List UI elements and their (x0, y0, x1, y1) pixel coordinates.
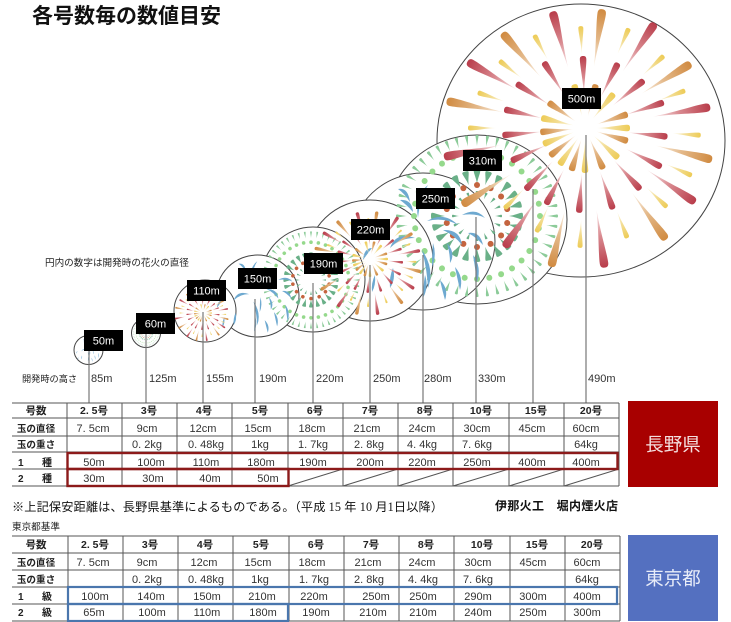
badge: Tokyo (628, 535, 718, 621)
row: weight (17, 574, 599, 586)
row: diameter (17, 557, 600, 569)
firework: 110m red burst (175, 289, 229, 341)
header row: 3号 (142, 539, 158, 551)
fireworks size chart (74, 4, 725, 403)
height lines (89, 135, 586, 403)
firework: 250m willow burst (363, 185, 485, 300)
header row: 15号 (526, 539, 548, 551)
badge: Nagano (628, 401, 718, 487)
header row: 号数 (26, 538, 47, 551)
header row: 15号 (525, 405, 547, 417)
row: class 1: 400m (572, 457, 600, 469)
header row: 3号 (141, 405, 157, 417)
row: diameter: 9cm (137, 557, 157, 569)
diameter labels (84, 88, 601, 351)
header row: 5号 (252, 405, 268, 417)
row: weight: 0. 48kg (188, 439, 224, 451)
row: weight: 7. 6kg (462, 439, 492, 451)
firework: 500m red and gold burst (443, 9, 713, 268)
header row: 20号 (581, 539, 603, 551)
row: class 1: 290m (464, 591, 492, 603)
row: diameter: 30cm (464, 423, 490, 435)
row: diameter: 24cm (409, 557, 435, 569)
row: class 2 (18, 472, 279, 485)
row: class 1: 100m (81, 591, 109, 603)
row: class 1: 250m (409, 591, 437, 603)
height labels: 220m (316, 373, 344, 385)
diameter labels: 220m (357, 224, 384, 236)
firework: 150m willow burst (217, 261, 293, 333)
height labels (22, 373, 616, 385)
row: diameter: 30cm (465, 557, 491, 569)
row: weight: 0. 2kg (132, 439, 162, 451)
row: weight: 2. 8kg (354, 439, 384, 451)
row: class 2: 250m (519, 607, 547, 619)
row: weight: 0. 2kg (132, 574, 162, 586)
row: class 1 (18, 456, 600, 469)
header row: 4号 (197, 539, 213, 551)
row: class 2: 2 (18, 474, 24, 485)
row: diameter: 7. 5cm (76, 557, 110, 569)
header row: 4号 (196, 405, 212, 417)
firework: 50m willow burst (76, 339, 100, 362)
row: class 1: 400m (573, 591, 601, 603)
blue highlight boxes (68, 587, 617, 621)
row: class 2: 180m (249, 607, 277, 619)
row: class 1: 110m (193, 457, 219, 469)
row: diameter: 18cm (299, 423, 325, 435)
row: class 1: 1 (18, 458, 24, 469)
maker credit: 伊那火工 堀内煙火店 (495, 498, 618, 513)
row: class 2 (18, 607, 601, 619)
row: class 2: 190m (302, 607, 330, 619)
row: weight: 1kg (251, 439, 269, 451)
header row: 6号 (308, 539, 324, 551)
row: class 1: 220m (300, 591, 328, 603)
row: diameter: 21cm (355, 557, 381, 569)
row: weight: 0. 48kg (188, 574, 224, 586)
row: class 1: 50m (83, 457, 105, 469)
row: class 1: 220m (408, 457, 436, 469)
row: class 1: 100m (137, 457, 165, 469)
header row: 6号 (307, 405, 323, 417)
row: class 2: 種 (42, 472, 52, 485)
safety distance note: ※上記保安距離は、長野県基準によるものである。（平成 15 年 10 月1日以降） (12, 499, 443, 514)
diameter labels: 60m (145, 318, 166, 330)
header row: 5号 (253, 539, 269, 551)
height labels: 155m (206, 373, 234, 385)
row: class 2: 240m (464, 607, 492, 619)
row: class 1: 250m (463, 457, 491, 469)
red highlight boxes (68, 453, 618, 486)
header row: 7号 (362, 405, 378, 417)
row: class 1: 1 (18, 592, 24, 603)
height labels: 85m (91, 373, 112, 385)
height labels: 490m (588, 373, 616, 385)
row: diameter: 60cm (573, 423, 599, 435)
firework: 220m red burst (313, 211, 421, 315)
row: diameter: 24cm (409, 423, 435, 435)
row: class 2: 50m (257, 473, 279, 485)
row: diameter: 玉の直径 (17, 557, 56, 569)
row: class 1: 300m (519, 591, 547, 603)
row: diameter (17, 423, 599, 435)
height labels: 125m (149, 373, 177, 385)
row: weight: 1kg (251, 574, 269, 586)
row: class 2: 210m (359, 607, 387, 619)
row: diameter: 15cm (245, 423, 271, 435)
row: diameter: 45cm (519, 423, 545, 435)
header row: 号数 (26, 404, 47, 417)
row: weight: 7. 6kg (463, 574, 493, 586)
row: weight: 2. 8kg (354, 574, 384, 586)
row: diameter: 9cm (137, 423, 157, 435)
diameter labels: 110m (193, 286, 220, 298)
firework: 190m green burst (262, 231, 360, 329)
row: class 1: 140m (137, 591, 165, 603)
title: 各号数毎の数値目安 (32, 4, 221, 28)
table: Nagano standard (12, 403, 619, 486)
row: class 1: 210m (248, 591, 276, 603)
height labels: 250m (373, 373, 401, 385)
badge: Nagano: 長野県 (645, 434, 701, 455)
row: weight: 64kg (575, 574, 599, 586)
row: weight: 1. 7kg (299, 574, 329, 586)
height labels: 190m (259, 373, 287, 385)
row: class 1: 190m (299, 457, 327, 469)
row: diameter: 12cm (190, 423, 216, 435)
row: class 1: 250m (362, 591, 390, 603)
row: class 1 (18, 591, 601, 603)
row: class 2: 級 (42, 607, 52, 619)
row: class 1: 級 (42, 591, 52, 603)
diameter labels: 190m (310, 258, 337, 270)
row: class 1: 180m (247, 457, 275, 469)
row: diameter: 45cm (520, 557, 546, 569)
row: weight (17, 439, 598, 451)
table grid (12, 536, 620, 621)
diameter labels: 250m (422, 194, 449, 206)
row: diameter: 玉の直径 (17, 423, 56, 435)
height labels: 280m (424, 373, 452, 385)
badge: Tokyo: 東京都 (645, 568, 701, 589)
row: class 2: 110m (194, 607, 220, 619)
diameter labels: 500m (568, 94, 595, 106)
diameter labels: 50m (93, 336, 114, 348)
row: weight: 1. 7kg (298, 439, 328, 451)
row: class 1: 200m (356, 457, 384, 469)
row: class 1: 種 (42, 456, 52, 469)
height labels: 330m (478, 373, 506, 385)
header row: 2. 5号 (81, 539, 109, 551)
row: diameter: 60cm (574, 557, 600, 569)
Tokyo table caption: 東京都基準 (12, 521, 60, 533)
row: class 2: 300m (573, 607, 601, 619)
header row: 2. 5号 (80, 405, 108, 417)
header row: 7号 (363, 539, 379, 551)
row: weight: 4. 4kg (408, 574, 438, 586)
diameter labels: 150m (244, 274, 271, 286)
row: class 2: 30m (142, 473, 164, 485)
firework: 310m green burst (396, 135, 558, 297)
row: diameter: 15cm (245, 557, 271, 569)
header row (26, 538, 603, 551)
firework: 60m green burst (133, 320, 159, 346)
row: weight: 玉の重さ (17, 439, 55, 451)
row: class 2: 100m (138, 607, 166, 619)
row: class 2: 40m (199, 473, 221, 485)
height labels: 開発時の高さ (22, 373, 77, 384)
header row: 10号 (471, 539, 493, 551)
header row: 10号 (470, 405, 492, 417)
header row: 20号 (580, 405, 602, 417)
row: class 2: 30m (83, 473, 105, 485)
row: diameter: 21cm (354, 423, 380, 435)
row: class 2: 2 (18, 608, 24, 619)
row: class 2: 65m (83, 607, 105, 619)
row: class 1: 150m (193, 591, 221, 603)
header row: 8号 (417, 405, 433, 417)
row: weight: 玉の重さ (17, 574, 55, 586)
row: class 1: 400m (518, 457, 546, 469)
header row (26, 404, 602, 417)
circle outlines (74, 4, 725, 364)
row: weight: 64kg (574, 439, 598, 451)
row: diameter: 12cm (191, 557, 217, 569)
header row: 8号 (418, 539, 434, 551)
table grid (12, 403, 619, 486)
note: circle numbers: 円内の数字は開発時の花火の直径 (45, 257, 189, 269)
diameter labels: 310m (469, 156, 496, 168)
table: Tokyo standard (12, 536, 620, 621)
row: diameter: 18cm (299, 557, 325, 569)
row: weight: 4. 4kg (407, 439, 437, 451)
row: class 2: 210m (409, 607, 437, 619)
row: diameter: 7. 5cm (76, 423, 110, 435)
